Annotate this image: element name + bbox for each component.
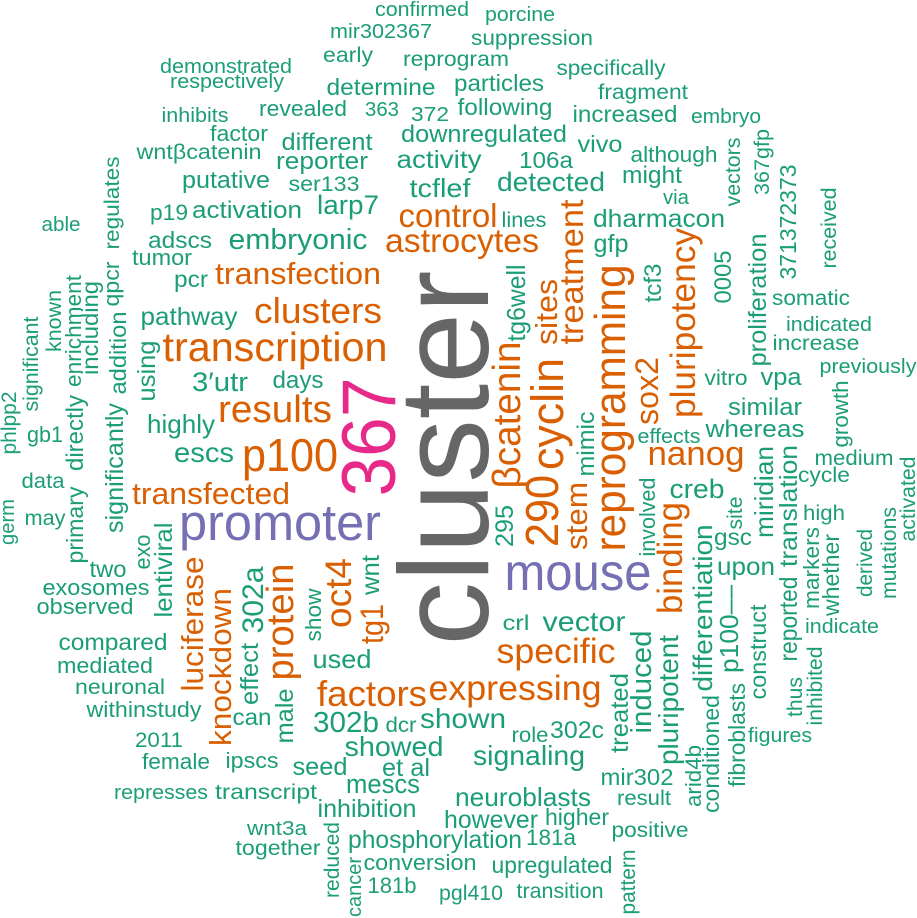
green terms: vertical: enrichment xyxy=(61,275,86,387)
green terms: vertical: including xyxy=(77,281,103,375)
green terms: vertical: treated xyxy=(606,673,634,753)
orange terms: sites xyxy=(529,279,564,345)
orange terms: results xyxy=(218,389,332,431)
green terms: vertical: wnt xyxy=(357,555,385,596)
green terms: horizontal: seed xyxy=(292,753,348,781)
green terms: horizontal: positive xyxy=(612,819,688,842)
green terms: horizontal: exosomes xyxy=(42,575,150,600)
green terms: horizontal: vitro xyxy=(704,367,748,390)
green terms: vertical: pluripotent xyxy=(653,635,684,765)
green terms: horizontal: 302b xyxy=(313,707,379,739)
orange terms: factors xyxy=(317,673,427,714)
green terms: horizontal: mir302367 xyxy=(330,21,432,43)
orange terms: stem xyxy=(559,482,594,550)
orange terms: transfected xyxy=(132,476,290,511)
green terms: vertical: lentiviral xyxy=(150,522,178,618)
green terms: vertical: involved xyxy=(635,478,660,556)
green terms: horizontal: inhibition xyxy=(318,795,416,823)
green terms: horizontal: reprogram xyxy=(403,48,509,71)
green terms: vertical: significant xyxy=(20,316,43,412)
green terms: vertical: directly xyxy=(62,395,89,471)
green terms: vertical: qpcr xyxy=(99,262,124,306)
green terms: horizontal: might xyxy=(622,162,682,189)
green terms: vertical: construct xyxy=(745,604,771,700)
orange terms: knockdown xyxy=(203,588,238,746)
green terms: horizontal: may xyxy=(24,507,66,530)
green terms: horizontal: female xyxy=(142,749,210,774)
green terms: horizontal: determine xyxy=(326,74,436,100)
green terms: horizontal: increase xyxy=(772,332,860,355)
green terms: horizontal: shown xyxy=(420,703,506,734)
green terms: vertical: fibroblasts xyxy=(724,683,750,787)
orange terms: p100 xyxy=(242,429,338,481)
green terms: vertical: miridian xyxy=(749,446,779,538)
green terms: horizontal: indicate xyxy=(805,616,879,638)
orange terms: βcatenin xyxy=(486,342,529,488)
green terms: horizontal: 372 xyxy=(411,104,449,126)
green terms: horizontal: et al xyxy=(382,754,430,782)
green terms: vertical: using xyxy=(133,340,161,402)
orange terms: luciferase xyxy=(175,556,210,692)
green terms: horizontal: gsc xyxy=(714,524,752,550)
green terms: vertical: induced xyxy=(626,630,658,734)
green terms: horizontal: represses xyxy=(114,782,208,804)
green terms: horizontal: gfp xyxy=(594,230,628,258)
orange terms: transcription xyxy=(162,324,388,370)
green terms: vertical: arid4b xyxy=(681,745,706,807)
green terms: horizontal: mediated xyxy=(57,653,153,678)
green terms: horizontal: mescs xyxy=(346,769,420,799)
green terms: horizontal: embryonic xyxy=(228,224,368,256)
orange terms xyxy=(132,197,744,746)
green terms: horizontal: vivo xyxy=(578,131,622,157)
green terms: vertical: tcf3 xyxy=(640,264,667,302)
green terms: horizontal: respectively xyxy=(170,71,284,93)
green terms: vertical: conditioned xyxy=(698,695,724,813)
green terms: vertical: differentiation xyxy=(688,525,718,691)
green terms: horizontal: 181b xyxy=(368,873,416,898)
green terms: vertical: known xyxy=(43,290,66,352)
green terms: horizontal: somatic xyxy=(772,287,850,310)
green terms: vertical: addition xyxy=(105,312,131,394)
purple terms: promoter xyxy=(179,494,381,551)
green terms: horizontal: 363 xyxy=(365,99,399,121)
green terms: horizontal: signaling xyxy=(473,740,585,771)
green terms: horizontal: observed xyxy=(36,594,134,619)
green terms: horizontal: crl xyxy=(502,612,530,635)
green terms: horizontal: able xyxy=(42,214,80,236)
green terms: horizontal: revealed xyxy=(259,96,347,121)
green terms: horizontal: can xyxy=(232,704,272,730)
green terms: horizontal: porcine xyxy=(485,4,555,26)
green terms: vertical: thus xyxy=(784,677,807,717)
orange terms: nanog xyxy=(648,435,744,473)
green terms: horizontal: upregulated xyxy=(492,852,612,878)
green terms: horizontal: transition xyxy=(516,880,604,903)
green terms: horizontal: gb1 xyxy=(27,422,63,447)
green terms: vertical: tg6well xyxy=(501,264,531,342)
green terms: horizontal: pathway xyxy=(140,303,238,331)
green terms: vertical: received xyxy=(818,187,841,269)
green terms: horizontal: ipscs xyxy=(226,748,278,773)
orange terms: oct4 xyxy=(318,558,359,628)
green terms: horizontal: putative xyxy=(182,167,270,194)
green terms: horizontal: activity xyxy=(396,146,482,174)
green terms: horizontal: together xyxy=(236,837,321,860)
green terms: horizontal: specifically xyxy=(556,57,666,80)
green terms: vertical: p100–– xyxy=(714,584,744,673)
green terms: horizontal: high xyxy=(803,502,845,525)
green terms: horizontal: previously xyxy=(820,356,916,378)
green terms: horizontal: 106a xyxy=(519,147,573,173)
green terms: horizontal: suppression xyxy=(471,27,593,50)
purple terms: mouse xyxy=(504,544,652,602)
green terms: horizontal: tumor xyxy=(132,245,192,270)
green terms: horizontal: dcr xyxy=(386,714,416,737)
green terms: vertical: translation xyxy=(775,445,803,567)
green terms: vertical: pattern xyxy=(617,850,640,914)
green terms: vertical: significantly xyxy=(101,403,129,533)
green terms: horizontal: used xyxy=(312,644,372,674)
green terms: horizontal: increased xyxy=(572,101,678,127)
green terms: horizontal: p19 xyxy=(150,200,188,225)
green terms: horizontal: data xyxy=(22,470,65,493)
green terms: vertical: 367gfp xyxy=(751,129,774,195)
green terms: horizontal: activation xyxy=(192,197,302,224)
purple terms xyxy=(179,494,652,602)
orange terms: transfection xyxy=(215,256,381,291)
green terms: horizontal: however xyxy=(444,806,538,834)
green terms: horizontal: ser133 xyxy=(288,173,360,196)
green terms: horizontal: compared xyxy=(58,629,168,655)
green terms: horizontal: showed xyxy=(344,731,444,762)
green terms: horizontal: higher xyxy=(545,804,609,830)
green terms: vertical: markers xyxy=(799,527,824,609)
green terms: horizontal: similar xyxy=(728,394,802,421)
top term: cluster: cluster xyxy=(373,270,515,646)
green terms: horizontal: adscs xyxy=(148,227,212,253)
green terms: horizontal: medium xyxy=(814,447,894,470)
orange terms: control xyxy=(398,197,498,234)
green terms: horizontal: although xyxy=(630,142,718,167)
green terms: horizontal: role xyxy=(512,724,548,747)
green terms: horizontal: vpa xyxy=(760,364,802,391)
orange terms: expressing xyxy=(428,669,602,708)
green terms: vertical: derived xyxy=(854,529,877,597)
green terms: horizontal: pgl410 xyxy=(439,882,503,905)
green terms: vertical: 295 xyxy=(491,505,519,547)
green terms: horizontal: two xyxy=(90,556,126,582)
green terms: vertical: primary xyxy=(62,486,88,564)
green terms: vertical: mimic xyxy=(573,412,600,476)
orange terms: astrocytes xyxy=(385,222,539,259)
green terms: horizontal: creb xyxy=(670,474,724,504)
green terms: horizontal: whereas xyxy=(704,416,804,443)
orange terms: clusters xyxy=(254,290,382,331)
green terms: horizontal: neuronal xyxy=(75,676,165,699)
green terms: vertical: vectors xyxy=(722,138,745,206)
green terms: horizontal: transcript xyxy=(215,781,317,804)
green terms: horizontal: dharmacon xyxy=(593,205,725,233)
green terms: horizontal: different xyxy=(282,129,373,156)
green terms: horizontal: tcflef xyxy=(410,173,471,203)
green terms: vertical: whether xyxy=(818,534,844,617)
green terms: horizontal: highly xyxy=(147,409,215,439)
green terms: horizontal: 302c xyxy=(550,717,604,744)
orange terms: pluripotency xyxy=(664,228,703,418)
green terms: horizontal: neuroblasts xyxy=(455,782,591,812)
orange terms: sox2 xyxy=(629,357,665,425)
green terms: vertical: 0005 xyxy=(710,250,737,304)
green terms: horizontal: 181a xyxy=(526,825,577,850)
green terms: vertical: 302a xyxy=(237,566,270,634)
green terms: vertical: mutations xyxy=(878,507,901,599)
green terms: vertical: cancer xyxy=(344,857,366,917)
green terms: horizontal: embryo xyxy=(691,106,761,128)
green terms: vertical: reported xyxy=(775,576,803,662)
green terms: horizontal: particles xyxy=(454,70,544,96)
green terms: vertical: 371372373 xyxy=(775,164,801,280)
green terms: horizontal: wntβcatenin xyxy=(135,141,262,164)
green terms: vertical: regulates xyxy=(101,156,124,250)
green terms: horizontal: following xyxy=(458,94,552,120)
orange terms: cyclin xyxy=(522,358,573,470)
green terms: horizontal: wnt3a xyxy=(246,818,308,840)
green terms: horizontal: vector xyxy=(542,606,626,637)
green terms: vertical: inhibited xyxy=(804,647,827,725)
green terms: horizontal: effects xyxy=(638,426,700,448)
green terms: horizontal: result xyxy=(617,787,671,810)
green terms: vertical: male xyxy=(271,688,299,744)
green terms: horizontal: cycle xyxy=(798,464,850,487)
green terms: vertical: exo xyxy=(130,534,155,570)
green terms: horizontal: via xyxy=(663,187,690,209)
green terms: horizontal: factor xyxy=(210,121,268,146)
green terms: horizontal: 2011 xyxy=(135,729,183,752)
green terms: horizontal: lines xyxy=(502,209,546,232)
orange terms: 290 xyxy=(516,475,568,547)
green terms: horizontal: early xyxy=(323,44,374,67)
green terms: horizontal: mir302 xyxy=(600,764,674,790)
green terms: horizontal: conversion xyxy=(364,850,476,875)
orange terms: treatment xyxy=(553,200,590,344)
second term: 367: 367 xyxy=(327,378,412,496)
green terms: horizontal: larp7 xyxy=(317,190,379,220)
green terms: horizontal: demonstrated xyxy=(160,56,292,78)
green terms: vertical: proliferation xyxy=(744,234,772,366)
green terms: horizontal: phosphorylation xyxy=(348,826,522,854)
orange terms: protein xyxy=(260,564,302,680)
green terms: horizontal: inhibits xyxy=(162,105,228,127)
green terms: horizontal: indicated xyxy=(786,314,872,336)
green terms: vertical: show xyxy=(301,588,326,642)
green terms: horizontal: figures xyxy=(748,725,812,747)
green terms: horizontal: reporter xyxy=(276,148,368,175)
green terms: horizontal: upon xyxy=(717,553,775,581)
green terms: vertical: site xyxy=(724,496,747,530)
green terms: horizontal: escs xyxy=(174,437,234,468)
green terms: vertical: effect xyxy=(236,643,264,705)
orange terms: specific xyxy=(496,632,616,671)
green terms: horizontal: days xyxy=(272,367,324,394)
green terms: vertical: growth xyxy=(828,380,853,448)
green terms: horizontal: detected xyxy=(497,167,605,197)
green terms: horizontal: pcr xyxy=(174,266,208,292)
orange terms: binding xyxy=(651,502,690,614)
green terms: vertical: reduced xyxy=(321,822,344,898)
green terms: horizontal: fragment xyxy=(598,81,688,104)
green terms: horizontal: downregulated xyxy=(401,121,567,148)
green terms: horizontal: withinstudy xyxy=(85,697,202,722)
orange terms: tg1 xyxy=(354,604,390,644)
green terms: horizontal: 3′utr xyxy=(192,367,248,397)
orange terms: reprogramming xyxy=(586,264,635,552)
